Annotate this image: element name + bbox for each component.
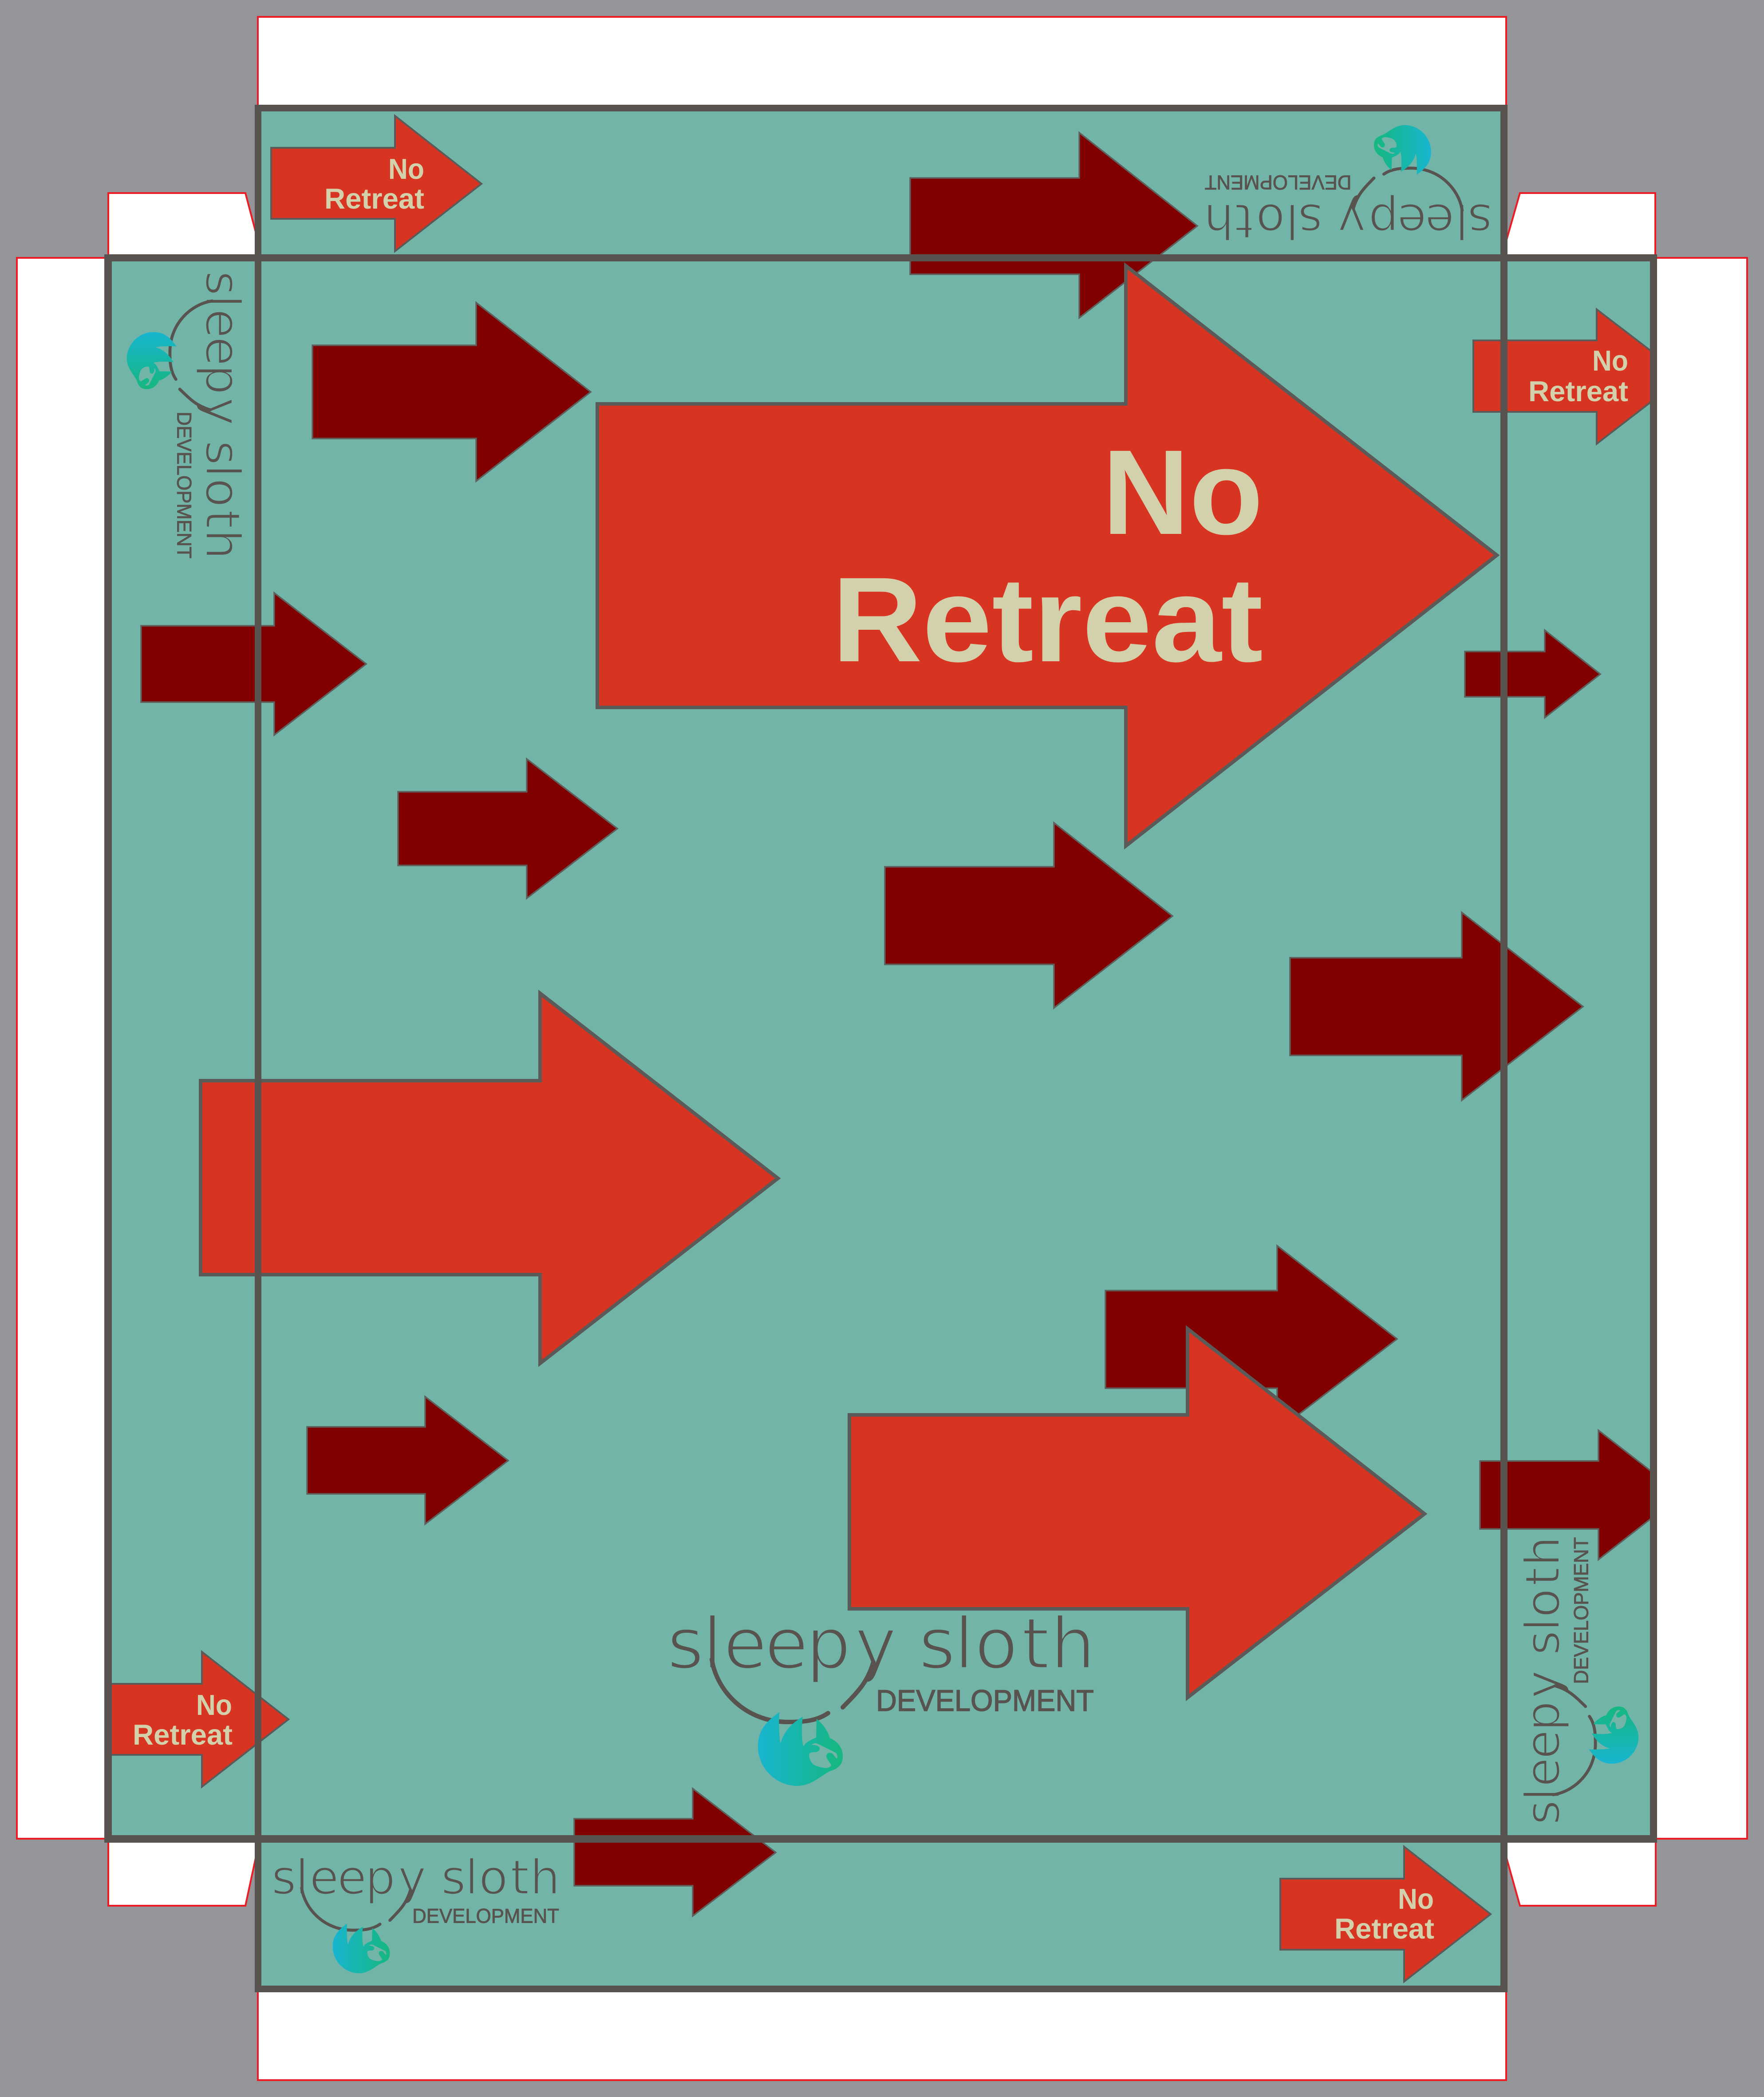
logo bottom panel: sleepy sloth [272, 1850, 560, 1906]
dark arrow top right [910, 133, 1197, 318]
dark arrow centre left [398, 759, 617, 898]
logo top panel rotated 180 degrees: sleepy sloth [1204, 193, 1492, 248]
top-right corner tab [1507, 193, 1655, 256]
small red arrow top left: No [388, 153, 424, 185]
bottom-right corner tab [1507, 1840, 1656, 1906]
dark arrow upper left [312, 303, 591, 481]
logo left panel rotated clockwise: sleepy sloth [194, 271, 250, 560]
box fold lines [104, 105, 1657, 1992]
top-left corner tab [108, 193, 256, 256]
bottom glue flap [258, 1991, 1506, 2080]
main logo: sleepy sloth development [667, 1602, 1095, 1786]
teal box surface [104, 105, 1657, 1992]
small red arrow top left: Retreat [324, 182, 424, 215]
right glue flap [1655, 258, 1747, 1839]
dark arrow lower left [307, 1397, 508, 1524]
main logo: sleepy sloth development: DEVELOPMENT [876, 1684, 1094, 1718]
small red arrow top left [271, 116, 481, 251]
dark arrow centre right [1290, 912, 1583, 1100]
dark arrow lower right [1105, 1246, 1397, 1431]
dark arrow far right clipped [1480, 1430, 1681, 1560]
small red arrow left side [78, 1652, 288, 1787]
logo bottom panel: DEVELOPMENT [412, 1904, 559, 1927]
logo top panel rotated 180 degrees [1204, 125, 1492, 248]
dark arrow centre [885, 823, 1172, 1008]
logo right panel rotated counter-clockwise [1515, 1536, 1638, 1825]
left glue flap [17, 258, 107, 1839]
large red arrow lower right [849, 1329, 1425, 1698]
small dark arrow right side [1465, 630, 1600, 718]
small red arrow bottom right: Retreat [1334, 1912, 1434, 1945]
main arrow text: No [1102, 425, 1263, 560]
top glue flap [258, 17, 1506, 107]
logo right panel rotated counter-clockwise: DEVELOPMENT [1570, 1537, 1592, 1684]
main logo: sleepy sloth development: sleepy sloth [667, 1602, 1095, 1685]
bottom-left corner tab [108, 1840, 256, 1906]
small red arrow left side: Retreat [133, 1718, 233, 1751]
logo top panel rotated 180 degrees: DEVELOPMENT [1205, 171, 1352, 194]
dark arrow bottom [574, 1789, 776, 1916]
small red arrow bottom right [1280, 1847, 1491, 1982]
small red arrow left side: No [196, 1689, 232, 1721]
main red arrow with No Retreat [597, 266, 1497, 846]
logo bottom panel [272, 1850, 560, 1973]
small red arrow right side [1473, 309, 1684, 444]
small red arrow right side: No [1592, 344, 1628, 377]
small red arrow right side: Retreat [1528, 375, 1628, 407]
logo left panel rotated clockwise: DEVELOPMENT [173, 411, 196, 558]
large red arrow left [201, 993, 778, 1363]
logo left panel rotated clockwise [127, 271, 250, 560]
small red arrow bottom right: No [1398, 1883, 1434, 1915]
logo right panel rotated counter-clockwise: sleepy sloth [1515, 1536, 1571, 1825]
dark arrow left side [141, 593, 366, 735]
main arrow text: Retreat [832, 552, 1263, 687]
